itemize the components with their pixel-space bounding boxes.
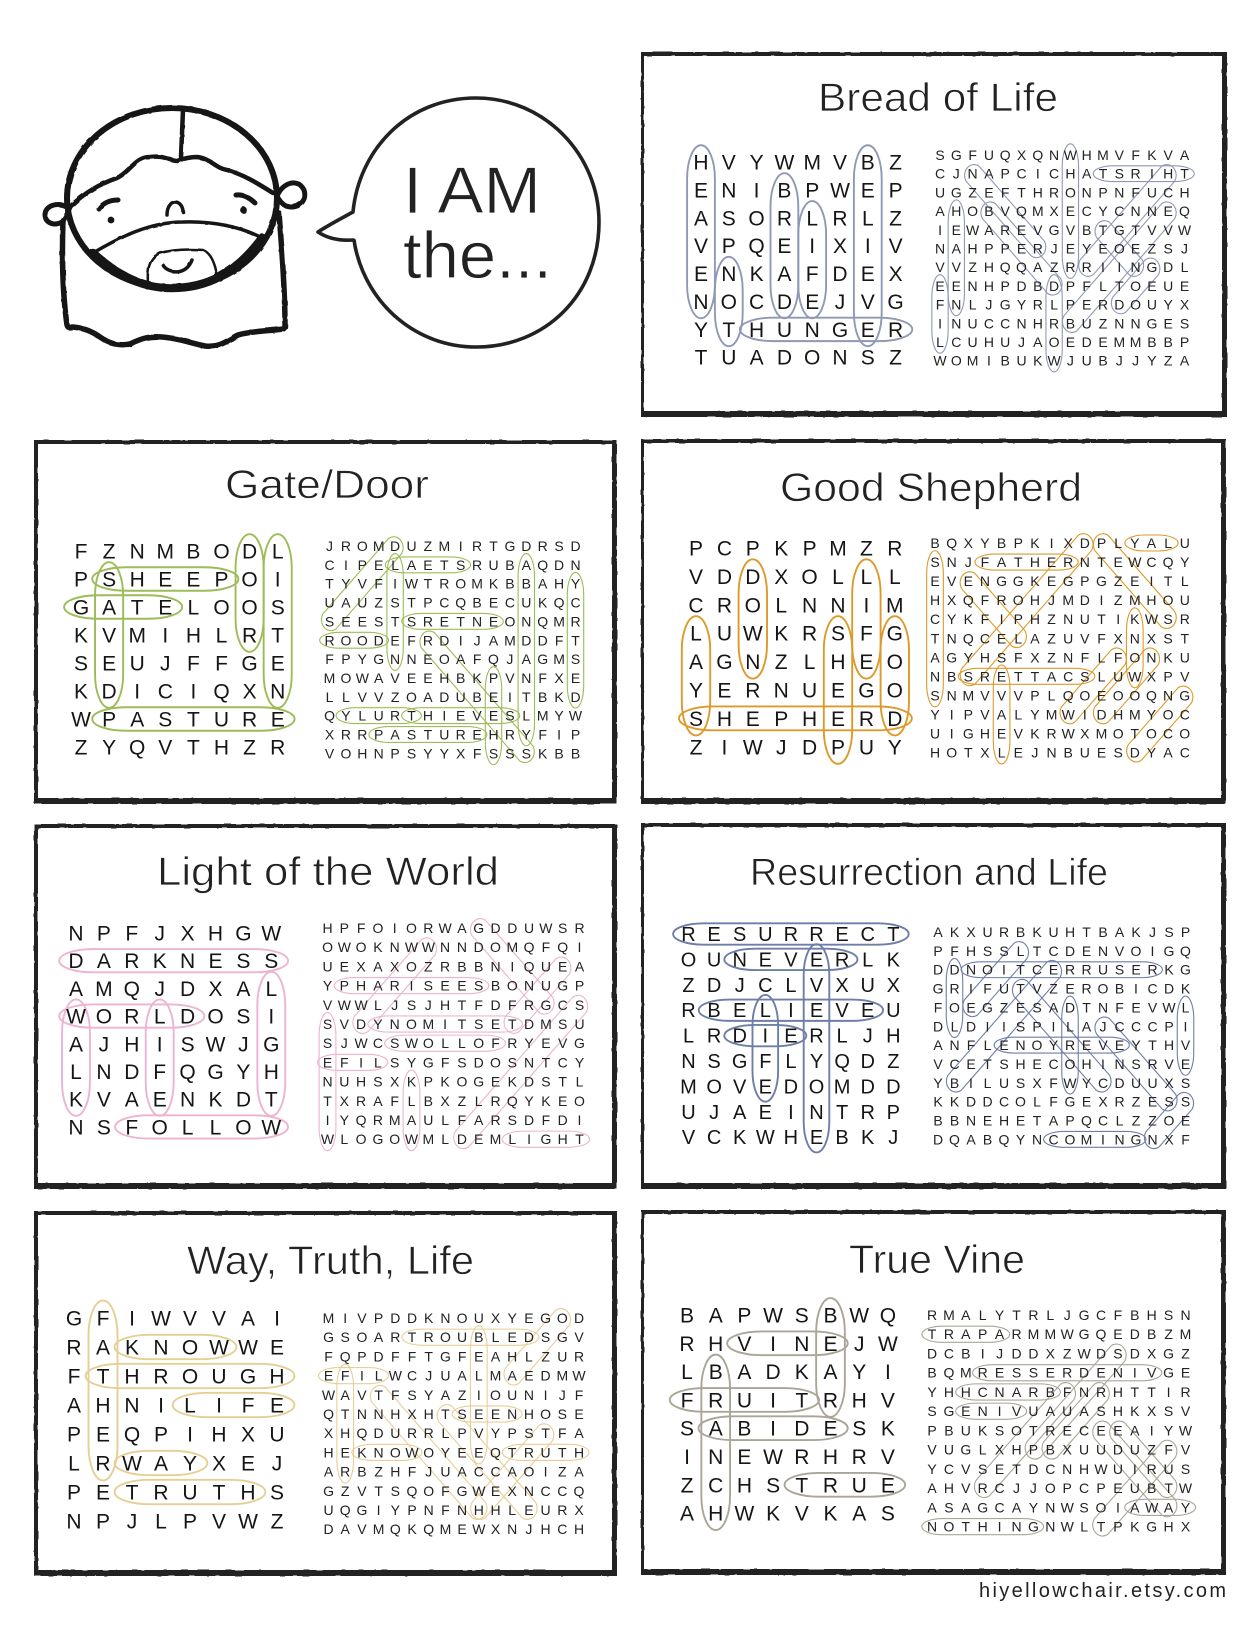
- answer ovals: [670, 1298, 905, 1530]
- letters: LCUHUJAOEDEMMBBP: [936, 334, 1189, 350]
- letters: SEESTSRETNEONQMR: [325, 613, 581, 629]
- letters: RAKNOWWE: [66, 1336, 284, 1360]
- letters: YBILUSXFWYCDUUXS: [933, 1075, 1190, 1091]
- panel: Gate/Door: [34, 440, 617, 804]
- letters: UGZEFTHRONPNFUCH: [935, 184, 1190, 200]
- letters: MOWAVEEHBKPVNFXE: [324, 670, 580, 686]
- small word search with answers: [687, 145, 912, 369]
- letters: FNLJGYRLPERDOUYX: [936, 297, 1190, 313]
- letters: SNMVVVPLQOEOOQNG: [930, 687, 1190, 703]
- bubble outline with tail: [318, 98, 599, 347]
- small word search with answers: [64, 534, 295, 760]
- letters: FQPDFFTGFEAHLZUR: [324, 1348, 584, 1364]
- letters: BAPWSBWQ: [680, 1304, 896, 1328]
- letters: LNDFQGYH: [70, 1061, 279, 1084]
- letters: GATELOOS: [73, 596, 285, 620]
- small word search with answers: [59, 922, 288, 1139]
- panel frame: [34, 1211, 617, 1576]
- letters: VCKWHEBKJ: [682, 1127, 898, 1149]
- letters: OWOKNWWNNDOMQFQI: [322, 939, 581, 955]
- letters: HPFOIORWAGDDUWSR: [322, 920, 585, 936]
- letters: BQMRESSERDENIVGE: [927, 1365, 1190, 1381]
- letters: ENKAFDEX: [694, 263, 903, 286]
- letters: NAHPPERJEYEOEZSJ: [935, 240, 1188, 256]
- letters: BBNEHETAPQCLZZOE: [933, 1112, 1190, 1128]
- panel: Bread of Life: [641, 52, 1227, 417]
- letters: TUADONSZ: [695, 346, 902, 369]
- answer ovals: [946, 942, 1194, 1149]
- heading: Good Shepherd: [780, 466, 1082, 510]
- letters: [688, 538, 904, 759]
- panel: Resurrection and Life: [641, 823, 1226, 1189]
- letters: NPJLPVWZ: [66, 1510, 284, 1534]
- heading: Light of the World: [157, 850, 499, 894]
- letters: LRWAYXEJ: [68, 1452, 282, 1476]
- heading: Way, Truth, Life: [187, 1239, 474, 1283]
- letters: CYKFIPHZNUTIKWSR: [930, 611, 1190, 627]
- letters: UJAEINTRP: [681, 1102, 900, 1124]
- answer ovals: [59, 949, 288, 1139]
- large word search with answers: [318, 1309, 589, 1537]
- letters: EVENGGKEGPGZEITL: [930, 573, 1189, 589]
- panel frame: [34, 824, 617, 1189]
- letters: GZVTSQOFGWEXNCCQ: [323, 1483, 585, 1499]
- letters: VOHNPSYYXFSSSKBB: [325, 745, 580, 761]
- letters: LLVVZOADUBEITBKD: [326, 689, 581, 705]
- answer ovals: [922, 1326, 1196, 1536]
- speech bubble: I AM the...: [318, 98, 599, 347]
- letters: UQGIYPNFNHHLEURX: [323, 1502, 584, 1518]
- letters: QTNNHXHTSEENHOSE: [323, 1406, 584, 1422]
- letters: YIPVALYMWIDHMYOC: [930, 706, 1190, 722]
- letters: OUNEVERLK: [681, 949, 901, 971]
- letters: FPYGNNEOAFQJAGMS: [325, 651, 580, 667]
- letters: SEUJFFGE: [74, 652, 285, 676]
- letters: PETRUTHS: [67, 1482, 284, 1504]
- letters: KVAENKDT: [69, 1089, 278, 1112]
- answer ovals: [679, 559, 912, 764]
- letters: AHWKVKAS: [680, 1503, 895, 1526]
- answer ovals: [317, 919, 590, 1151]
- letters: DQABQYNCOMINGNXF: [933, 1131, 1190, 1147]
- letters: YCVSETDCNHWUIRUS: [927, 1461, 1190, 1477]
- letters: SGENIVUAUASHKXSV: [927, 1403, 1191, 1419]
- large word search with answers: [927, 534, 1193, 764]
- letters: YTHUNGER: [694, 319, 903, 342]
- letters: AHNILIFE: [67, 1394, 284, 1418]
- letters: RESURRECT: [681, 924, 899, 946]
- letters: UAUZSTPCQBECUKQC: [324, 595, 581, 611]
- letters: NOCDEJVG: [693, 291, 904, 314]
- letters: AKXURBKUHTBAKJSP: [933, 924, 1190, 940]
- letters: WAVTFSYAZIOUNIJF: [322, 1387, 583, 1403]
- answer ovals: [64, 534, 295, 731]
- letters: ASORLRLZ: [694, 207, 902, 230]
- letters: GFIWVVAI: [66, 1308, 280, 1330]
- letters: LUWKRSFG: [690, 623, 903, 646]
- letters: DCBIJDDXZWDSDXGZ: [927, 1345, 1190, 1361]
- letters: ANFLENOYREVEYTHV: [933, 1037, 1191, 1053]
- small word search with answers: [66, 1301, 294, 1534]
- letters: [324, 538, 583, 761]
- answer ovals: [687, 145, 912, 346]
- letters: RBELIEVEU: [681, 1000, 901, 1022]
- letters: KDICIQXN: [74, 680, 285, 704]
- large word search with answers: [932, 144, 1194, 372]
- bubble text line 2: the...: [403, 218, 552, 292]
- letters: PFHSSLTCDENVOIGQ: [933, 943, 1191, 959]
- letters: [693, 152, 904, 369]
- letters: [927, 1307, 1193, 1535]
- panel frame: [641, 1210, 1226, 1575]
- letters: GRIFUTVZEROBICDK: [933, 981, 1191, 997]
- letters: KKDDCOLFGEXRZESS: [933, 1094, 1190, 1110]
- letters: NOTHINGNWLTPKGHX: [927, 1519, 1191, 1535]
- letters: QYLURTHIEVESLMYW: [324, 708, 583, 724]
- answer ovals: [932, 144, 1194, 372]
- letters: [71, 540, 285, 760]
- letters: LRDIERLJH: [683, 1026, 901, 1048]
- letters: AMQJDXAL: [69, 978, 277, 1001]
- letters: [66, 922, 281, 1139]
- letters: EENHPDBDPFLTOEUE: [935, 278, 1189, 294]
- small word search with answers: [673, 923, 909, 1152]
- letters: HVYWMVBZ: [693, 152, 902, 174]
- letters: ROODEFRDIJAMDDFT: [324, 632, 580, 648]
- letters: LBADKAYI: [681, 1361, 891, 1384]
- letters: MIVPDDKNOUXYEGOD: [323, 1310, 584, 1326]
- letters: ZYQVTHZR: [75, 736, 285, 760]
- large word search with answers: [320, 537, 584, 765]
- letters: IEWAREVGVBTGTVVW: [938, 222, 1192, 238]
- answer ovals: [673, 923, 909, 1152]
- letters: [933, 147, 1192, 369]
- letters: TXRAFLBXZLRQYKEO: [323, 1093, 585, 1109]
- letters: SJWCSWOLLOFRYEVG: [323, 1035, 585, 1051]
- letters: VPQEIXIV: [694, 235, 903, 258]
- letters: XRRPASTUREHRYFIP: [325, 726, 580, 742]
- letters: HXQFROHJMDIZMHOU: [930, 592, 1190, 608]
- letters: ARBZHFJUACCAOIZA: [324, 1464, 584, 1480]
- letters: YHHCNARBFNRHTTIR: [927, 1384, 1191, 1400]
- letters: [933, 924, 1191, 1147]
- heading: Gate/Door: [225, 463, 429, 507]
- letters: VUGLXHPBXUUDUZFV: [927, 1442, 1191, 1458]
- footer credit: hiyellowchair.etsy.com: [979, 1580, 1226, 1602]
- letters: MOVEDOMDD: [680, 1076, 901, 1098]
- letters: DDNOITCERRUSERKG: [933, 962, 1191, 978]
- letters: FOEGZESADTNFEVWL: [934, 999, 1190, 1015]
- letters: VWWLJSJHTFDFRGCS: [323, 997, 584, 1013]
- letters: RMALYTRLJGCFBHSN: [927, 1307, 1191, 1323]
- letters: PBUKSOTRECEEAIYW: [927, 1422, 1193, 1438]
- letters: EFILSYGFSDOSNTCY: [323, 1054, 585, 1070]
- letters: RHVINEJW: [679, 1333, 898, 1356]
- letters: TRAPARMMWGQEDBZM: [928, 1326, 1191, 1342]
- letters: CJNAPCICHATSRIHT: [935, 166, 1189, 182]
- answer ovals: [320, 537, 584, 765]
- letters: GSOARTROUBLEDSGV: [323, 1329, 584, 1345]
- small word search with answers: [670, 1298, 905, 1530]
- letters: WOMIBUKWJUBJJYZA: [933, 353, 1190, 369]
- letters: ZIWJDPUY: [690, 736, 902, 759]
- answer ovals: [318, 1309, 589, 1519]
- panel frame: [641, 52, 1227, 417]
- letters: AHVRCJJOPCPEUBTW: [927, 1480, 1193, 1496]
- letters: VCETSHECOHINSRVE: [933, 1056, 1190, 1072]
- letters: DARKNESS: [68, 950, 278, 973]
- letters: VDDXOLLL: [689, 566, 901, 589]
- large word search with answers: [317, 919, 590, 1151]
- heading: Resurrection and Life: [750, 852, 1108, 894]
- letters: INUCCNHRBUZNNGES: [938, 315, 1189, 331]
- letters: KVMIHLRT: [74, 624, 284, 648]
- heading: Bread of Life: [818, 76, 1058, 120]
- letters: BQXYBPKIXDPLYALU: [930, 535, 1190, 551]
- letters: CROLNNIM: [688, 594, 904, 617]
- letters: IYQRMAULFARSDFDI: [326, 1112, 581, 1128]
- letters: AJHISWJG: [69, 1033, 279, 1056]
- letters: YERNUEGO: [689, 680, 903, 702]
- panel: True Vine: [641, 1210, 1226, 1575]
- letters: UEXAXOZRBBNIQUEA: [322, 958, 585, 974]
- answer ovals: [927, 534, 1193, 764]
- letters: NSFOLLOW: [68, 1116, 281, 1139]
- letters: SABIDESK: [680, 1418, 895, 1441]
- letters: SVDYNOMITSETDMSU: [323, 1016, 585, 1032]
- letters: YPHARISEESBONUGP: [323, 978, 584, 994]
- letters: [322, 1310, 586, 1537]
- letters: HEKNOWOYEEQTRUTH: [323, 1444, 584, 1460]
- letters: NPFJXHGW: [68, 922, 281, 946]
- small word search with answers: [679, 538, 912, 764]
- letters: ENIBPWEP: [694, 179, 903, 202]
- panel frame: [641, 439, 1226, 804]
- panel: Light of the World: [34, 824, 617, 1189]
- large word search with answers: [933, 924, 1194, 1149]
- letters: INEWRHRV: [684, 1446, 895, 1469]
- letters: VVZHQQAZRRIINGDL: [935, 259, 1189, 275]
- letters: NSGFLYQDZ: [681, 1051, 899, 1073]
- letters: FZNMBODL: [75, 540, 284, 564]
- letters: DLDIISPILAJCCCPI: [933, 1018, 1187, 1034]
- heading: True Vine: [849, 1238, 1025, 1282]
- letters: DAVMQKQMEWXNJHCH: [323, 1521, 584, 1537]
- letters: [321, 920, 585, 1147]
- letters: [680, 924, 901, 1149]
- letters: ZCHSTRUE: [681, 1474, 895, 1497]
- panel frame: [641, 823, 1226, 1189]
- letters: WORLDOSI: [66, 1006, 274, 1029]
- letters: SHEPHERD: [689, 708, 902, 731]
- letters: PEQPIHXU: [67, 1424, 285, 1446]
- letters: SNJFATHERNTEWCQY: [930, 554, 1190, 570]
- letters: WPASTURE: [71, 708, 285, 732]
- letters: JROMDUZMIRTGDRSD: [326, 538, 581, 554]
- character: bearded Jesus face: [45, 108, 305, 346]
- letters: [66, 1308, 285, 1534]
- panel: Good Shepherd: [641, 439, 1226, 804]
- letters: [930, 535, 1190, 761]
- answer ovals: [86, 1301, 294, 1504]
- letters: UIGHEVKRWXMOTOCO: [930, 726, 1190, 742]
- letters: AHOBVQMXECYCNNEQ: [935, 203, 1190, 219]
- letters: SGFUQXQNWHMVFKVA: [935, 147, 1190, 163]
- letters: CIPELAETSRUBAQDN: [324, 557, 581, 573]
- letters: XHQDURRLPVYPSTFA: [324, 1425, 584, 1441]
- bubble text line 1: I AM: [403, 153, 541, 227]
- letters: PSHEEPOI: [74, 568, 281, 592]
- letters: FRUITRHV: [681, 1389, 895, 1412]
- letters: WLOGOWMLDEMLIGHT: [321, 1131, 584, 1147]
- panel frame: [34, 440, 617, 804]
- panel: Way, Truth, Life: [34, 1211, 617, 1576]
- letters: [679, 1304, 898, 1526]
- letters: HOTXLEJNBUESDYAC: [930, 745, 1190, 761]
- large word search with answers: [922, 1307, 1196, 1536]
- letters: TNQCELAZUVFXNXST: [931, 630, 1189, 646]
- letters: AGNZLHEO: [689, 651, 903, 674]
- letters: EFILWCJUALMAEDMW: [324, 1368, 586, 1384]
- letters: PCPKPMZR: [689, 538, 902, 560]
- letters: TYVFIWTROMKBBAHY: [325, 576, 581, 592]
- letters: ASAGCAYNWSOIAWAY: [927, 1499, 1191, 1515]
- letters: AGYHSFXZNFLFONKU: [930, 649, 1190, 665]
- letters: ZDJCLVXUX: [682, 975, 900, 997]
- letters: FTHROUGH: [68, 1366, 285, 1388]
- letters: NUHSXKPKOGEKDSTL: [322, 1074, 584, 1090]
- letters: NBSRETTACSLUWXPV: [930, 668, 1190, 684]
